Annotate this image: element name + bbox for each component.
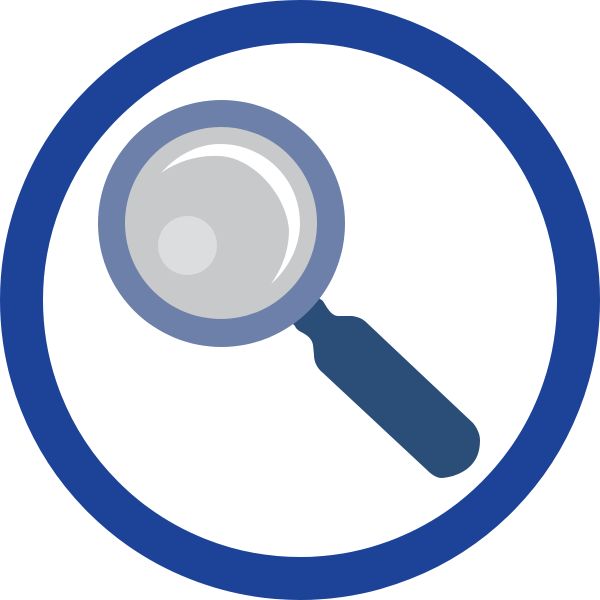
magnifier lens <box>125 127 317 319</box>
lens highlight crescent <box>161 144 300 284</box>
magnifier handle <box>289 292 480 478</box>
magnifier rim <box>98 100 345 347</box>
icon: magnifying glass <box>98 100 480 478</box>
lens glare spot <box>158 216 217 275</box>
